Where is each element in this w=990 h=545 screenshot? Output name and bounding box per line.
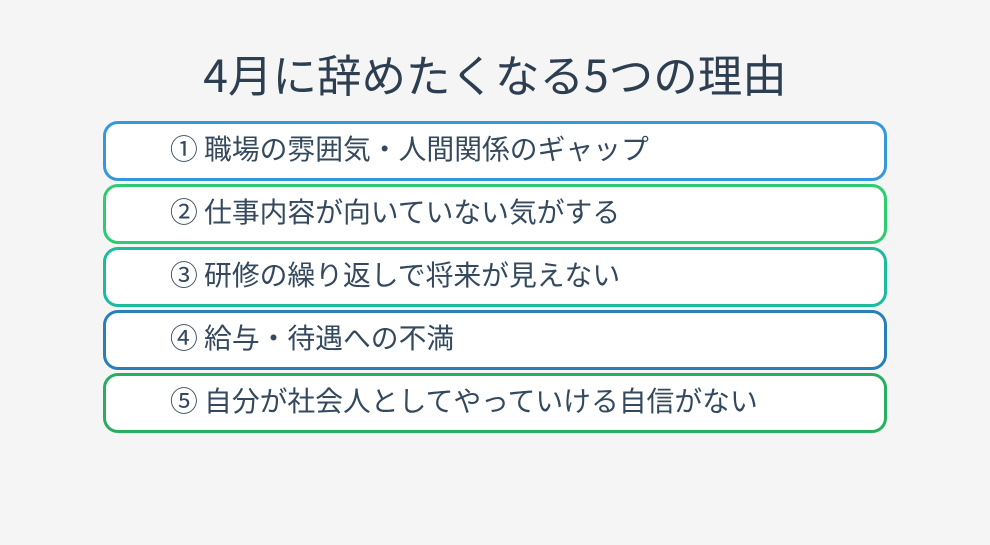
panel: reason 3: [103, 247, 887, 307]
panel: reason 1: [103, 121, 887, 181]
text: reason 2: ② 仕事内容が向いていない気がする: [170, 191, 620, 231]
text: reason 1: ① 職場の雰囲気・人間関係のギャップ: [170, 128, 649, 168]
text: reason 5: ⑤ 自分が社会人としてやっていける自信がない: [170, 380, 758, 420]
text: reason 3: ③ 研修の繰り返しで将来が見えない: [170, 254, 620, 294]
panel: reason 4: [103, 310, 887, 370]
panel: reason 5: [103, 373, 887, 433]
title: 4月に辞めたくなる5つの理由: [203, 40, 787, 105]
panel: reason 2: [103, 184, 887, 244]
text: reason 4: ④ 給与・待遇への不満: [170, 317, 454, 357]
